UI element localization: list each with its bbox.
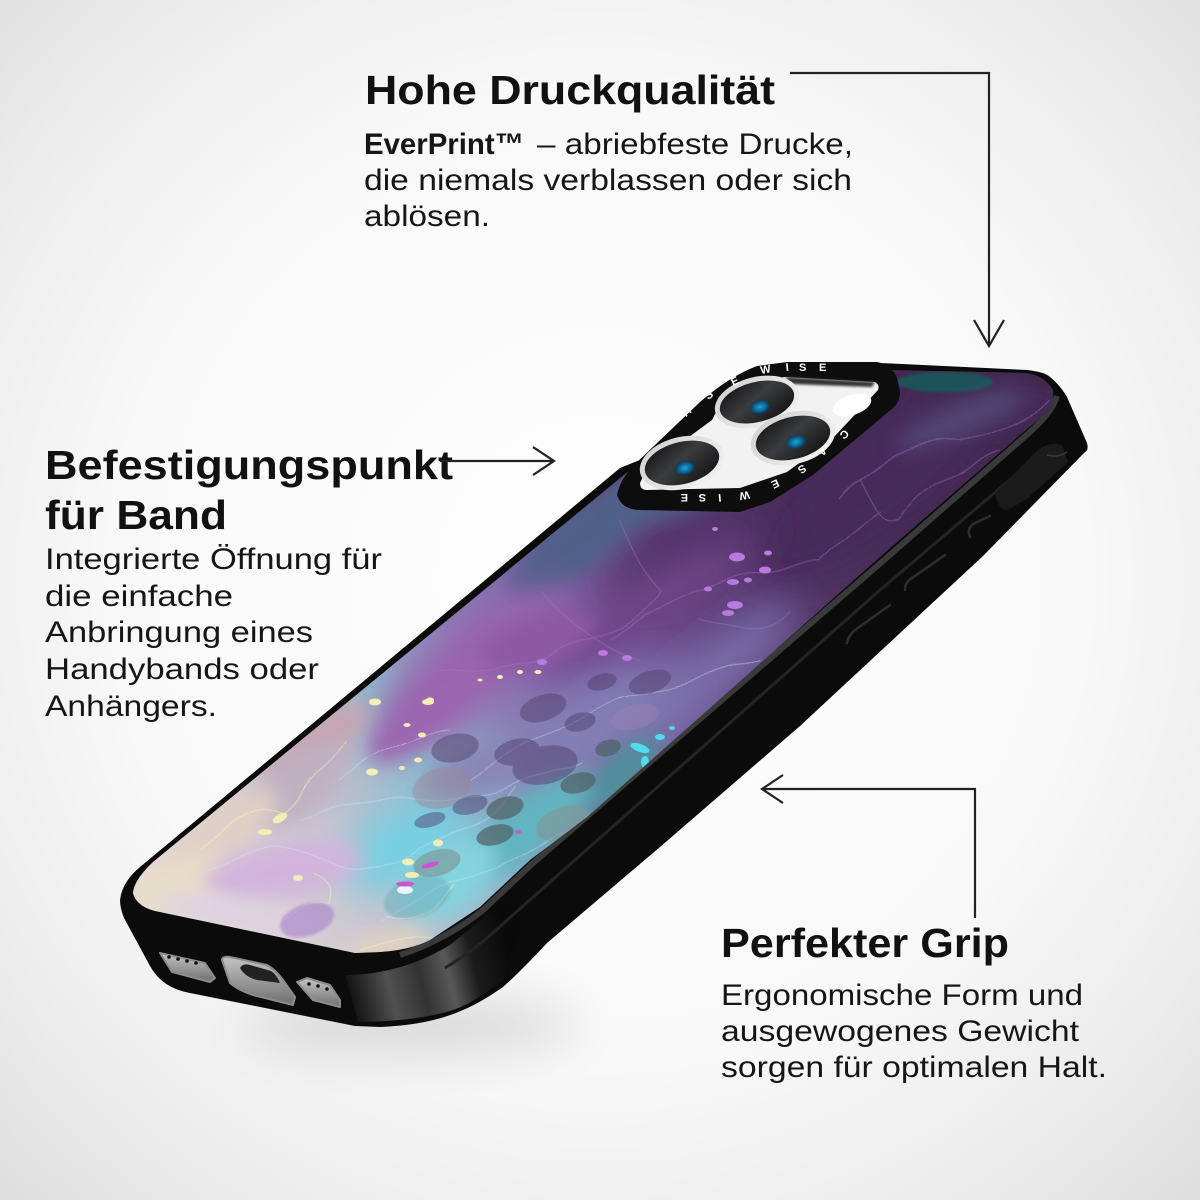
heading: grip: Perfekter Grip bbox=[721, 920, 1009, 966]
CASEWISE ring text: CASEWISE bbox=[662, 362, 826, 434]
lavender blue lower band bbox=[660, 585, 810, 742]
text: grip: sorgen für optimalen Halt. bbox=[721, 1051, 1107, 1084]
heading: print quality: Hohe Druckqualität bbox=[365, 67, 775, 113]
text: strap attachment: die einfache bbox=[45, 580, 233, 613]
lilac grey cream bbox=[259, 694, 374, 776]
text: print quality: – abriebfeste Drucke, bbox=[537, 128, 853, 161]
side buttons bbox=[847, 516, 990, 643]
text: grip bbox=[721, 979, 1107, 1084]
text: strap attachment: Handybands oder bbox=[45, 653, 319, 686]
slate blue band bbox=[500, 472, 646, 599]
side switch bbox=[995, 444, 1068, 510]
text: strap attachment bbox=[45, 543, 382, 723]
heading: strap attachment: Befestigungspunkt bbox=[45, 442, 453, 488]
heading: strap attachment: für Band bbox=[45, 492, 227, 538]
heading: strap attachment bbox=[45, 442, 453, 538]
side rim highlight bbox=[400, 396, 1057, 955]
lens: left bbox=[634, 427, 730, 499]
camera ring bbox=[617, 362, 900, 512]
dark upper purple bbox=[758, 370, 1016, 584]
lens: top bbox=[709, 367, 805, 437]
CASEWISE ring text bbox=[662, 362, 851, 503]
bottom speaker left bbox=[160, 953, 215, 982]
side switch highlight bbox=[1047, 452, 1067, 456]
arrow: strap attachment bbox=[440, 447, 554, 475]
case body bbox=[120, 363, 1088, 1027]
text: print quality bbox=[364, 128, 853, 233]
text: grip: Ergonomische Form und bbox=[721, 979, 1083, 1012]
CASEWISE ring text: CASEWISE bbox=[681, 427, 851, 503]
artwork dot pattern bbox=[275, 665, 674, 944]
phone shadow bbox=[240, 1003, 580, 1047]
arrow: print quality bbox=[790, 73, 1004, 346]
bottom speaker right bbox=[297, 978, 340, 1007]
case corner highlight bbox=[345, 900, 522, 1022]
camera window inner shade bbox=[785, 377, 875, 387]
callout: print quality bbox=[364, 67, 853, 233]
text: print quality: ablösen. bbox=[364, 200, 490, 233]
flash bbox=[830, 389, 874, 421]
callout: grip bbox=[721, 920, 1107, 1084]
teal and cyan bbox=[578, 728, 668, 814]
text: strap attachment: Integrierte Öffnung für bbox=[45, 543, 382, 576]
bottom charging port bbox=[222, 957, 295, 1005]
phone case illustration bbox=[111, 314, 1088, 1027]
lens: right bbox=[745, 402, 841, 474]
text: strap attachment: Anhängers. bbox=[45, 690, 217, 723]
camera window bbox=[640, 377, 879, 490]
callout: strap attachment bbox=[45, 442, 453, 723]
printed back artwork bbox=[133, 370, 1054, 953]
text: grip: ausgewogenes Gewicht bbox=[721, 1015, 1080, 1048]
text: print quality: EverPrint™ bbox=[364, 128, 524, 161]
text: print quality: die niemals verblassen oder sich bbox=[364, 164, 852, 197]
artwork veins bbox=[200, 400, 1050, 950]
artwork paint splatter bbox=[537, 527, 772, 665]
text: strap attachment: Anbringung eines bbox=[45, 616, 313, 649]
mid purple bands bbox=[530, 530, 759, 692]
arrow: grip bbox=[762, 775, 975, 918]
camera bump bbox=[617, 362, 900, 512]
